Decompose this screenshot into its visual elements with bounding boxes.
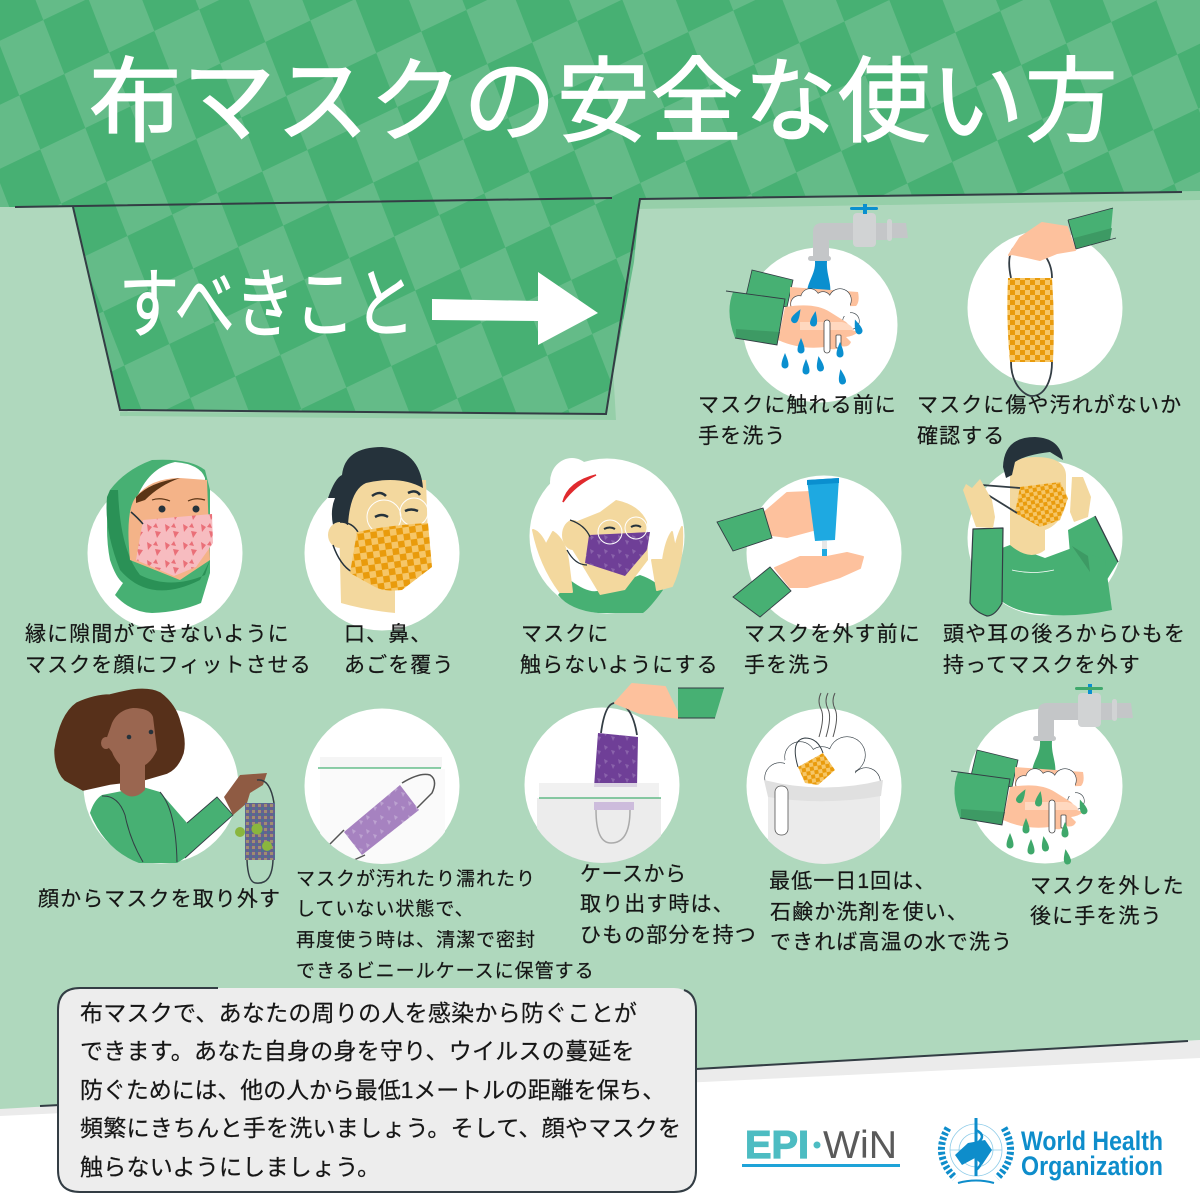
step: wash hands after removing: 後に手を洗う [1030, 905, 1163, 928]
logo: EPI-WiN: WiN [823, 1124, 897, 1167]
step: fit mask to face [25, 460, 312, 677]
step: store in clean plastic case: していない状態で、 [296, 898, 475, 920]
step: fit mask to face: 縁に隙間ができないように [25, 623, 290, 646]
step: store in clean plastic case [296, 708, 595, 982]
step: do not touch mask: マスクに [521, 623, 609, 646]
step: store in clean plastic case: マスクが汚れたり濡れたり [296, 868, 536, 890]
logo: World Health Organization: World Health [1021, 1126, 1163, 1156]
title: 布マスクの安全な使い方 [89, 50, 1119, 154]
header outline [15, 192, 1182, 414]
panel: main green background [0, 190, 1200, 1116]
step: wash mask in hot soapy water: 最低一日1回は、 [769, 870, 936, 893]
step: wash hands before touching [698, 204, 908, 448]
step: wash mask in hot soapy water: できれば高温の水で洗う [770, 931, 1013, 954]
step: wash hands after removing: マスクを外した [1030, 875, 1185, 898]
callout: key message [58, 988, 696, 1192]
step: wash hands before touching: 手を洗う [698, 425, 786, 448]
callout: key message: 頻繁にきちんと手を洗いましょう。そして、顔やマスクを [80, 1115, 681, 1141]
icon: hand holding orange mask [1007, 208, 1116, 396]
step: wash mask in hot soapy water: 石鹸か洗剤を使い、 [770, 901, 969, 924]
icon: older woman with purple mask [533, 458, 682, 613]
step: remove mask by straps: 頭や耳の後ろからひもを [943, 623, 1186, 646]
step: store in clean plastic case: できるビニールケースに保管する [296, 960, 595, 982]
step: fit mask to face: マスクを顔にフィットさせる [25, 654, 312, 677]
step: wash hands after removing [951, 684, 1185, 928]
step: inspect mask [917, 208, 1182, 448]
icon: man with orange mask [328, 447, 432, 613]
step: do not touch mask [520, 458, 719, 677]
step: remove mask by straps [943, 437, 1186, 677]
callout: key message: できます。あなた自身の身を守り、ウイルスの蔓延を [80, 1038, 635, 1064]
panel: checkered header [0, 0, 1200, 414]
subheading: what to do: すべきこと [119, 262, 415, 348]
step: clean hands before removing: 手を洗う [744, 654, 832, 677]
callout: key message: 布マスクで、あなたの周りの人を感染から防ぐことが [80, 1000, 637, 1026]
logo: EPI-WiN: EPI [745, 1124, 809, 1167]
icon: man removing orange mask [963, 437, 1118, 616]
step: take mask off face [38, 689, 281, 911]
icon: hands with sanitizer tube [717, 478, 863, 617]
step: do not touch mask: 触らないようにする [520, 654, 719, 677]
icon: tap and washing hands, green water [951, 684, 1133, 865]
arrow [432, 272, 598, 345]
callout: key message: 防ぐためには、他の人から最低1メートルの距離を保ち、 [80, 1077, 665, 1103]
logo: World Health Organization [941, 1118, 1163, 1183]
icon: mask in zip bag [318, 757, 445, 869]
callout: key message: 触らないようにしましょう。 [80, 1154, 380, 1180]
icon: hand lifting mask from case [537, 684, 724, 868]
icon: woman holding contaminated mask [55, 689, 275, 883]
step: hold by straps when taking out: 取り出す時は、 [580, 893, 735, 916]
step: hold by straps when taking out: ひもの部分を持つ [580, 924, 757, 947]
step: inspect mask: マスクに傷や汚れがないか [917, 394, 1182, 417]
step: clean hands before removing [717, 476, 921, 677]
logo: EPI-WiN [742, 1124, 900, 1167]
logo: World Health Organization: Organization [1021, 1151, 1163, 1181]
icon: tap and washing hands [726, 204, 908, 385]
step: hold by straps when taking out: ケースから [580, 863, 686, 886]
step: hold by straps when taking out [524, 684, 757, 947]
icon: woman in hijab with pink mask [107, 460, 213, 613]
step: wash mask in hot soapy water [746, 693, 1013, 954]
subheading: what to do [119, 262, 598, 348]
step: cover mouth, nose, chin [304, 447, 460, 677]
step: store in clean plastic case: 再度使う時は、清潔で密封 [296, 929, 536, 951]
icon: bucket with foam and mask [764, 693, 883, 870]
step: cover mouth, nose, chin: あごを覆う [344, 654, 454, 677]
step: wash hands before touching: マスクに触れる前に [698, 394, 897, 417]
step: remove mask by straps: 持ってマスクを外す [943, 654, 1141, 677]
step: cover mouth, nose, chin: 口、鼻、 [344, 623, 432, 646]
step: inspect mask: 確認する [917, 425, 1005, 448]
step: take mask off face: 顔からマスクを取り外す [38, 888, 281, 911]
step: clean hands before removing: マスクを外す前に [744, 623, 921, 646]
